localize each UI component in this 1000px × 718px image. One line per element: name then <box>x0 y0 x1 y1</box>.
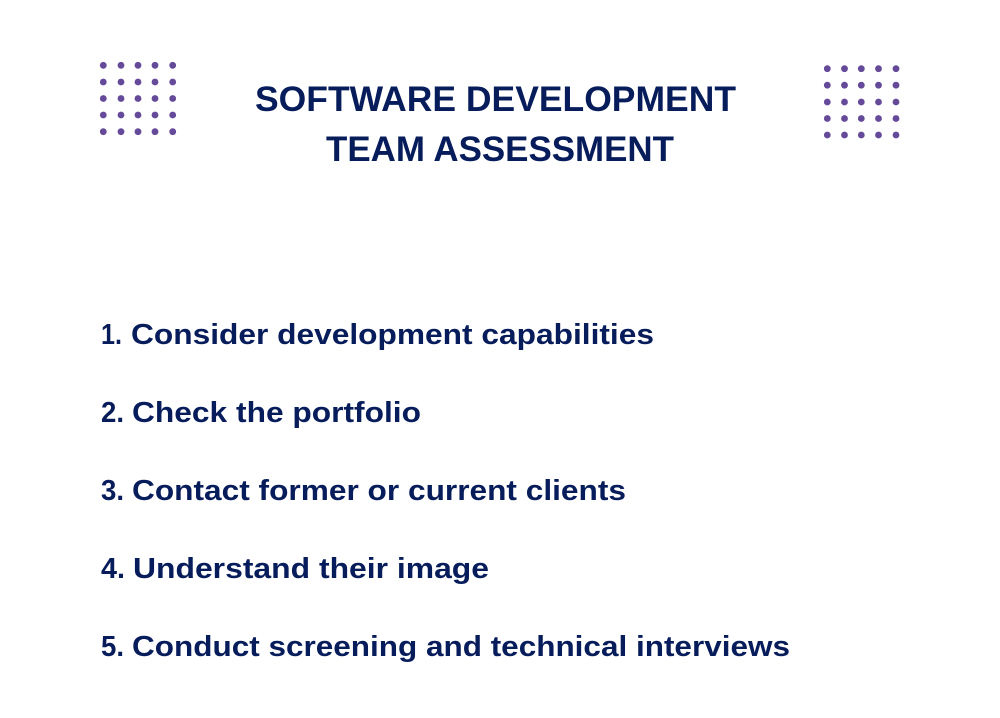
list item 4: 4. <box>101 553 125 585</box>
title: SOFTWARE DEVELOPMENT <box>255 80 736 119</box>
numbered list <box>101 319 790 663</box>
list item 3: Contact former or current clients <box>132 475 626 507</box>
list item 3: 3. <box>101 475 124 507</box>
list item 1: Consider development capabilities <box>131 319 654 351</box>
list item 1: 1. <box>101 319 122 351</box>
icon: dot grid right <box>824 65 899 138</box>
icon: dot grid left <box>100 62 176 135</box>
list item 2: 2. <box>101 397 124 429</box>
title <box>255 80 736 169</box>
list item 2: Check the portfolio <box>132 397 421 429</box>
title: TEAM ASSESSMENT <box>326 130 674 169</box>
list item 4: Understand their image <box>133 553 489 585</box>
list item 5: Conduct screening and technical interviews <box>132 631 790 663</box>
list item 5: 5. <box>101 631 124 663</box>
